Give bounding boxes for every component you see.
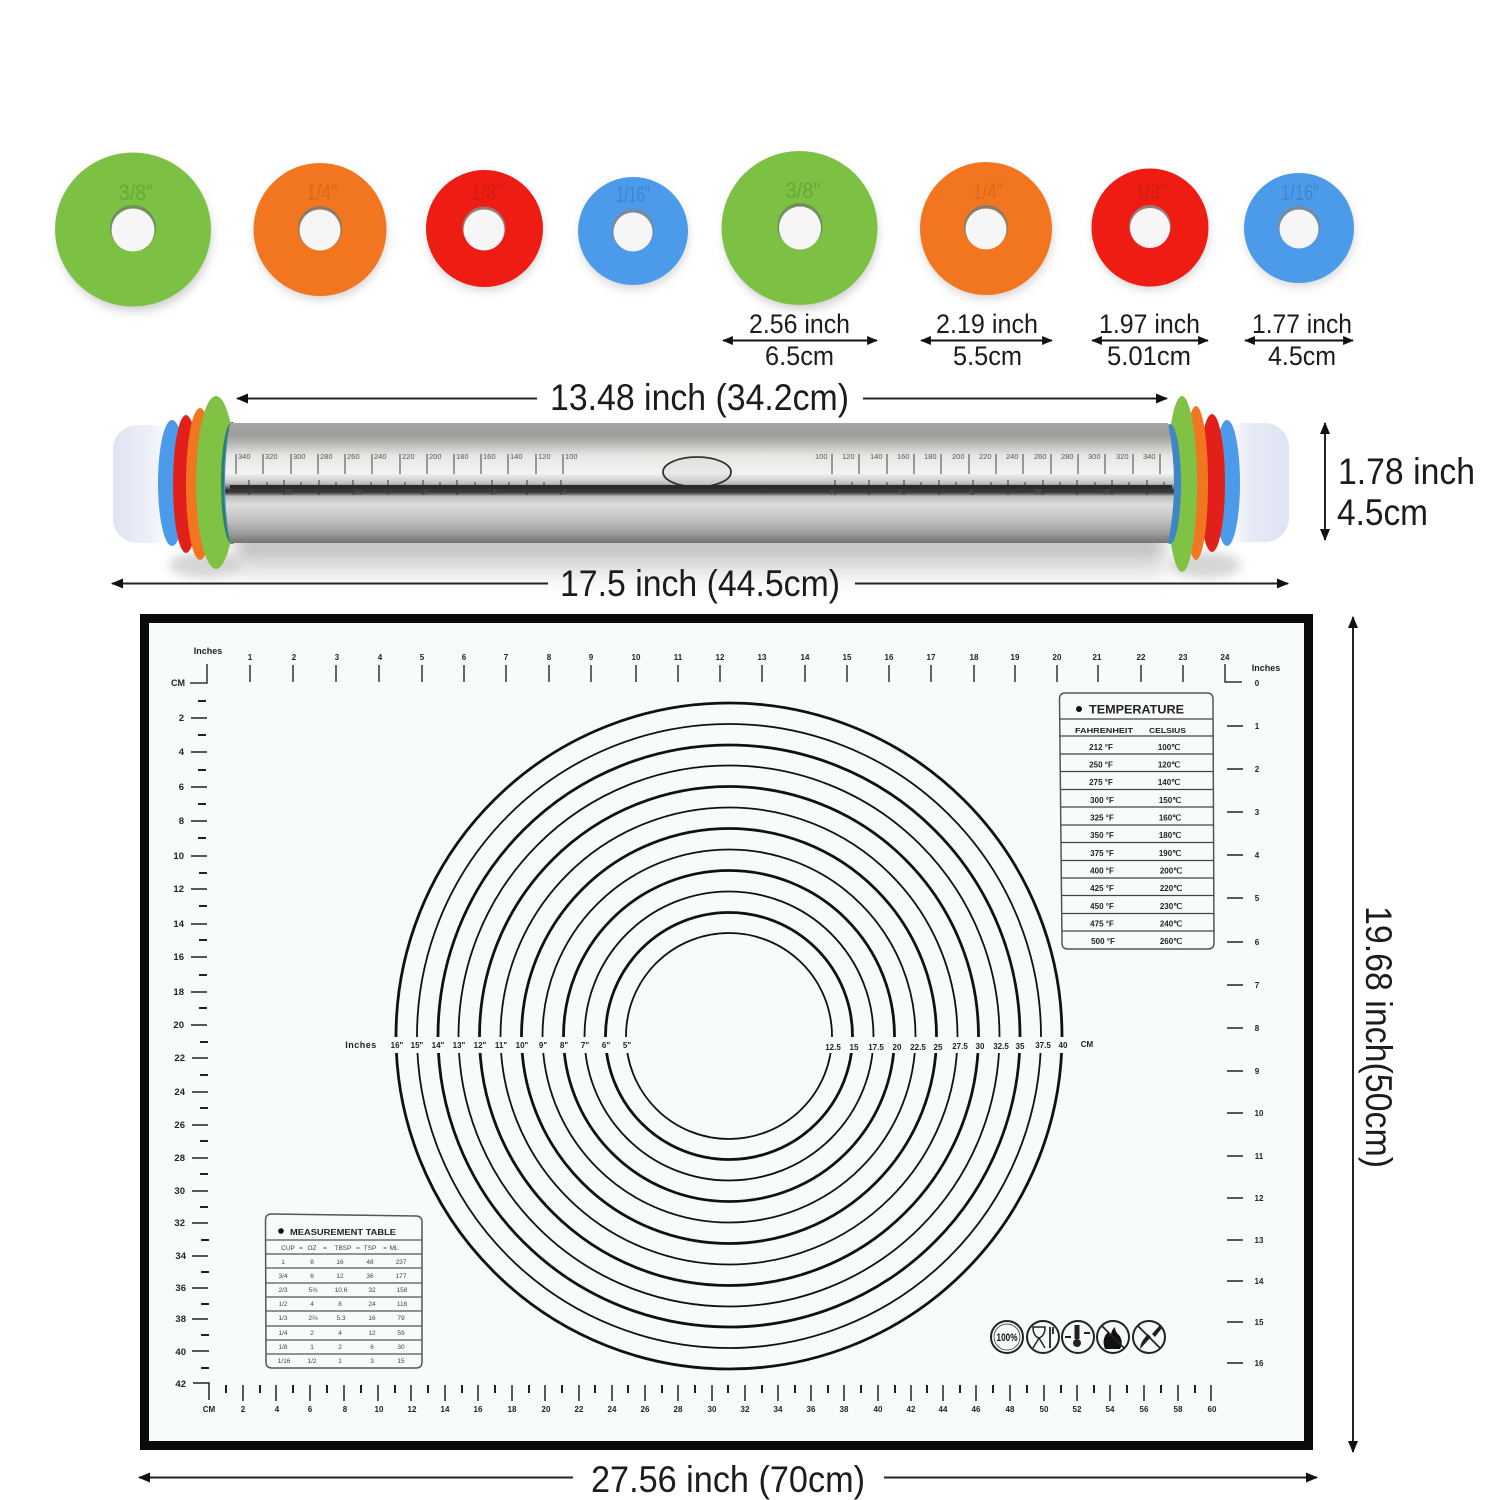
bottom centimetre ruler: 24: [608, 1405, 617, 1414]
circle inch labels: 8": [560, 1041, 568, 1050]
left centimetre ruler: 14: [173, 919, 185, 930]
disc: blue 1/16: [578, 177, 688, 289]
left ruler markings: 300: [293, 452, 306, 461]
temperature table: [1060, 693, 1214, 949]
bottom centimetre ruler: 52: [1073, 1405, 1082, 1414]
measurement table: CUP: [281, 1245, 295, 1252]
left spacer stack: [158, 396, 243, 569]
measurement table: OZ: [307, 1245, 317, 1252]
measurement table: 8: [310, 1259, 314, 1266]
left ruler markings: 4: [562, 488, 566, 497]
disc: blue 1.77 inch: 1/16": [1281, 180, 1319, 205]
right inch ruler: 12: [1255, 1194, 1264, 1203]
circle inch labels: 13": [453, 1041, 466, 1050]
right ruler markings: 300: [1088, 452, 1101, 461]
measurement table: 2: [338, 1344, 342, 1351]
measurement table: 59: [397, 1330, 405, 1337]
left centimetre ruler: 10: [173, 851, 184, 862]
temperature table: 212 °F: [1089, 743, 1113, 752]
bottom centimetre ruler: 36: [807, 1405, 816, 1414]
measurement table: 4: [310, 1301, 314, 1308]
bottom centimetre ruler: 48: [1006, 1405, 1015, 1414]
disc: orange 2.19 inch: 1/4": [973, 179, 1003, 204]
bottom centimetre ruler: 40: [874, 1405, 883, 1414]
measurement table: 1: [338, 1358, 342, 1365]
temperature table: TEMPERATURE: [1089, 704, 1184, 716]
left ruler markings: 10: [354, 488, 362, 497]
icon: no knife: [1133, 1321, 1165, 1353]
temperature table: 300 °F: [1090, 796, 1114, 805]
measurement table: 1/2: [278, 1301, 288, 1308]
disc: red 1.97 inch: 1.97 inch: [1099, 309, 1200, 339]
right inch ruler: 5: [1255, 894, 1260, 903]
temperature table: 350 °F: [1090, 831, 1114, 840]
right ruler markings: 6: [899, 488, 903, 497]
measurement table: =: [356, 1245, 360, 1252]
bottom centimetre ruler: 28: [674, 1405, 683, 1414]
pastry mat: [144, 618, 1308, 1446]
top inch ruler: 20: [1053, 653, 1062, 662]
circle inch labels: 9": [539, 1041, 547, 1050]
right ruler markings: 200: [952, 452, 965, 461]
left ruler markings: 180: [456, 452, 469, 461]
measurement table: 16: [336, 1259, 344, 1266]
temperature table: 240℃: [1160, 920, 1182, 928]
right inch ruler: 16: [1255, 1359, 1264, 1368]
bottom centimetre ruler: 2: [241, 1405, 246, 1414]
temperature table: 150℃: [1159, 796, 1181, 805]
bottom centimetre ruler: 4: [275, 1405, 280, 1414]
left ruler markings: 120: [538, 452, 551, 461]
left centimetre ruler: 28: [174, 1153, 185, 1164]
top inch ruler: 6: [462, 653, 467, 662]
right inch ruler: 9: [1255, 1067, 1260, 1076]
temperature table: 325 °F: [1090, 814, 1114, 822]
icon: food safe: [1027, 1321, 1059, 1353]
measurement table: 118: [397, 1301, 408, 1308]
temperature table: 260℃: [1160, 937, 1182, 946]
left ruler markings: 160: [483, 452, 496, 461]
disc: blue 1.77 inch: 1.77 inch: [1252, 309, 1352, 339]
measurement table: 79: [397, 1315, 405, 1322]
disc: blue 1.77 inch: [1244, 173, 1354, 371]
measurement table: 36: [366, 1273, 374, 1280]
temperature table: 400 °F: [1090, 866, 1114, 876]
left centimetre ruler: 38: [175, 1314, 186, 1325]
measurement table: 1/8: [278, 1344, 288, 1351]
right ruler markings: 8: [969, 488, 973, 497]
right inch ruler: 15: [1255, 1318, 1264, 1327]
measurement table: 2: [310, 1330, 314, 1337]
circle centimetre labels: 32.5: [993, 1042, 1009, 1051]
top inch ruler: 17: [927, 653, 936, 662]
top inch ruler: 2: [292, 653, 297, 662]
measurement table: 1/2: [307, 1358, 317, 1365]
bottom centimetre ruler: 50: [1040, 1405, 1049, 1414]
left ruler markings: 280: [320, 452, 333, 461]
left centimetre ruler: 12: [173, 884, 184, 895]
temperature table: 250 °F: [1089, 760, 1113, 770]
measurement table: 1/16: [278, 1358, 291, 1365]
right ruler markings: 260: [1034, 452, 1047, 461]
mat border: [144, 618, 1308, 1446]
measurement table: 1/4: [278, 1330, 288, 1337]
icon: temperature range: [1062, 1321, 1094, 1353]
left ruler markings: 140: [510, 452, 523, 461]
bottom centimetre ruler: 10: [375, 1405, 384, 1414]
right ruler markings: 4: [830, 488, 834, 497]
right inch ruler: Inches: [1252, 663, 1280, 673]
bottom centimetre ruler: 16: [474, 1405, 483, 1414]
measurement table: =: [383, 1245, 387, 1252]
circle inch labels: [345, 1040, 631, 1050]
measurement table: 12: [336, 1273, 344, 1280]
top inch ruler: 18: [970, 653, 979, 662]
dimension: pin total length: 17.5 inch (44.5cm): [560, 563, 840, 604]
circle centimetre labels: 12.5: [825, 1043, 841, 1052]
right ruler markings: 340: [1143, 452, 1156, 461]
right ruler markings: 180: [924, 452, 937, 461]
disc: orange 1/4: 1/4": [306, 180, 338, 205]
top inch ruler: 19: [1011, 653, 1020, 662]
right inch ruler: 10: [1255, 1109, 1264, 1118]
left ruler markings: 260: [347, 452, 360, 461]
circle inch labels: 6": [602, 1041, 610, 1050]
top inch ruler: 23: [1179, 653, 1188, 662]
left ruler markings: 200: [429, 452, 442, 461]
left centimetre ruler: 32: [174, 1218, 185, 1229]
measurement table: 1: [281, 1259, 285, 1266]
right ruler markings: 100: [815, 452, 828, 461]
top inch ruler: 13: [758, 653, 767, 662]
bottom centimetre ruler: 44: [939, 1405, 948, 1414]
right inch ruler: 14: [1255, 1277, 1264, 1286]
right ruler markings: 12: [1103, 488, 1111, 497]
top inch ruler: Inches: [194, 646, 222, 656]
measurement table: 10.6: [335, 1287, 348, 1294]
temperature table: 500 °F: [1091, 937, 1115, 946]
bottom centimetre ruler: 32: [741, 1405, 750, 1414]
top inch ruler: [171, 646, 1242, 688]
bottom centimetre ruler: 54: [1106, 1405, 1115, 1414]
icon: 100 percent: [991, 1321, 1023, 1353]
measurement table: 2⅔: [308, 1315, 318, 1322]
measurement table: 32: [368, 1287, 376, 1294]
right inch ruler: 4: [1255, 851, 1260, 860]
left ruler markings: 320: [265, 452, 278, 461]
measurement table: ML: [389, 1245, 399, 1252]
temperature table: FAHRENHEIT: [1075, 726, 1134, 735]
bottom centimetre ruler: 34: [774, 1405, 783, 1414]
disc: orange 1/4: [254, 163, 386, 299]
left centimetre ruler: 42: [175, 1379, 186, 1390]
top inch ruler: 4: [378, 653, 383, 662]
disc: red 1.97 inch: 5.01cm: [1107, 341, 1191, 371]
left ruler markings: 6: [493, 488, 497, 497]
measurement table: 15: [397, 1358, 405, 1365]
right ruler markings: 120: [842, 452, 855, 461]
icon: no flame: [1097, 1321, 1129, 1353]
disc: green 2.56 inch: 2.56 inch: [749, 309, 850, 339]
temperature table: 220℃: [1160, 884, 1182, 893]
right inch ruler: 11: [1255, 1152, 1264, 1161]
left centimetre ruler: 6: [179, 782, 184, 793]
measurement table: 6: [310, 1273, 314, 1280]
circle inch labels: 14": [432, 1041, 445, 1050]
left ruler markings: 240: [374, 452, 387, 461]
disc: green 2.56 inch: 3/8": [786, 178, 820, 203]
left centimetre ruler: 30: [174, 1186, 185, 1197]
top inch ruler: 12: [716, 653, 725, 662]
measurement table: =: [323, 1245, 327, 1252]
left centimetre ruler: 22: [174, 1053, 185, 1064]
icon row: certifications: [991, 1321, 1165, 1353]
right ruler markings: 160: [897, 452, 910, 461]
bottom centimetre ruler: 6: [308, 1405, 313, 1414]
measurement table: 1: [310, 1344, 314, 1351]
top inch ruler: 11: [674, 653, 683, 662]
measurement table: 4: [338, 1330, 342, 1337]
right inch ruler: 0: [1255, 679, 1260, 688]
disc: green 2.56 inch: 6.5cm: [765, 341, 834, 371]
left end cap: [113, 425, 178, 543]
right ruler markings: 140: [870, 452, 883, 461]
disc: orange 2.19 inch: 2.19 inch: [936, 309, 1038, 339]
circle centimetre labels: 15: [850, 1043, 859, 1052]
disc: red 1.97 inch: 1/8": [1136, 179, 1166, 204]
left ruler markings: 220: [402, 452, 415, 461]
left ruler markings: 100: [565, 452, 578, 461]
left ruler markings: [236, 452, 578, 497]
circle centimetre labels: 35: [1016, 1042, 1025, 1051]
right inch ruler: 2: [1255, 765, 1260, 774]
right ruler markings: 220: [979, 452, 992, 461]
dimension: pin diameter: 4.5cm: [1337, 492, 1428, 533]
spacer discs row with dimensions: [722, 151, 1354, 371]
measurement table: 16: [368, 1315, 376, 1322]
barrel oval logo: [663, 457, 731, 487]
concentric circles: [396, 703, 1062, 1369]
circle centimetre labels: 25: [934, 1043, 943, 1052]
circle inch labels: 12": [474, 1041, 487, 1050]
circle centimetre labels: 20: [893, 1043, 902, 1052]
left centimetre ruler: 20: [173, 1020, 184, 1031]
temperature table: 475 °F: [1090, 920, 1114, 928]
temperature table: 450 °F: [1090, 902, 1114, 911]
measurement table: 237: [396, 1259, 407, 1266]
measurement table: TBSP: [335, 1245, 351, 1252]
right ruler markings: 320: [1116, 452, 1129, 461]
top inch ruler: 10: [632, 653, 641, 662]
right inch ruler: 8: [1255, 1024, 1260, 1033]
temperature table: 275 °F: [1089, 778, 1113, 787]
measurement table: 3: [370, 1358, 374, 1365]
right inch ruler: 3: [1255, 808, 1260, 817]
top inch ruler: 14: [801, 653, 810, 662]
bottom centimetre ruler: [203, 1385, 1217, 1414]
temperature table: 190℃: [1159, 849, 1181, 858]
circle centimetre labels: 37.5: [1035, 1041, 1051, 1050]
left centimetre ruler: 2: [179, 713, 184, 724]
top inch ruler: 21: [1093, 653, 1102, 662]
top inch ruler: 9: [589, 653, 594, 662]
bottom centimetre ruler: 18: [508, 1405, 517, 1414]
disc: blue 1/16: 1/16": [616, 182, 650, 207]
temperature table: CELSIUS: [1149, 726, 1186, 735]
left centimetre ruler: 26: [174, 1120, 185, 1131]
right inch ruler: 7: [1255, 981, 1260, 990]
top inch ruler: 1: [248, 653, 253, 662]
circle inch labels: 15": [411, 1041, 424, 1050]
temperature table: 100℃: [1158, 743, 1180, 752]
measurement table: 3/4: [278, 1273, 288, 1280]
bottom centimetre ruler: 56: [1140, 1405, 1149, 1414]
right spacer stack: [1159, 396, 1240, 572]
temperature table: 230℃: [1160, 902, 1182, 911]
icon: 100 percent: 100%: [996, 1332, 1018, 1344]
measurement table: TSP: [364, 1245, 376, 1252]
bottom centimetre ruler: 26: [641, 1405, 650, 1414]
circle centimetre labels: 40: [1059, 1041, 1068, 1050]
left centimetre ruler: [173, 701, 209, 1400]
right ruler markings: [815, 452, 1164, 497]
right ruler markings: 280: [1061, 452, 1074, 461]
dimension: pin diameter: 1.78 inch: [1338, 451, 1475, 492]
right inch ruler: 6: [1255, 938, 1260, 947]
disc: green 2.56 inch: [722, 151, 878, 371]
temperature table: 120℃: [1158, 760, 1180, 770]
measurement table: [266, 1214, 422, 1368]
bottom centimetre ruler: 14: [441, 1405, 450, 1414]
temperature table: 200℃: [1160, 866, 1182, 876]
left centimetre ruler: 36: [175, 1283, 186, 1294]
circle inch labels: 10": [516, 1041, 529, 1050]
disc: red 1/8: 1/8": [472, 180, 502, 205]
top inch ruler: 5: [420, 653, 425, 662]
left centimetre ruler: 8: [179, 816, 184, 827]
dimension: pin barrel length: 13.48 inch (34.2cm): [550, 377, 849, 418]
disc: orange 2.19 inch: 5.5cm: [953, 341, 1022, 371]
bottom centimetre ruler: 42: [907, 1405, 916, 1414]
steel barrel: [225, 423, 1174, 543]
circle inch labels: 11": [495, 1041, 507, 1050]
top inch ruler: 3: [335, 653, 340, 662]
measurement table: 12: [368, 1330, 376, 1337]
top inch ruler: 7: [504, 653, 509, 662]
measurement table: 1/3: [278, 1315, 288, 1322]
left centimetre ruler: 16: [173, 952, 184, 963]
temperature table: 180℃: [1159, 831, 1181, 840]
top inch ruler: 8: [547, 653, 552, 662]
dimension: pin diameter: [1325, 423, 1475, 540]
circle centimetre labels: 17.5: [868, 1043, 884, 1052]
dimension: mat width: 27.56 inch (70cm): [591, 1459, 865, 1500]
top inch ruler: 16: [885, 653, 894, 662]
left centimetre ruler: 24: [174, 1087, 186, 1098]
temperature table: 425 °F: [1090, 884, 1114, 893]
circle centimetre labels: CM: [1081, 1040, 1094, 1049]
right inch ruler: 1: [1255, 722, 1260, 731]
measurement table: 5⅓: [308, 1287, 318, 1294]
measurement table: 24: [368, 1301, 376, 1308]
bottom centimetre ruler: 8: [343, 1405, 348, 1414]
right ruler markings: 240: [1006, 452, 1019, 461]
disc: red 1.97 inch: [1092, 168, 1208, 371]
disc: green 3/8: 3/8": [119, 180, 153, 205]
circle centimetre labels: 22.5: [910, 1043, 926, 1052]
circle inch labels: 16": [391, 1041, 404, 1050]
left ruler markings: 8: [423, 488, 427, 497]
temperature table: 160℃: [1159, 814, 1181, 822]
temperature table: 140℃: [1158, 778, 1180, 787]
left centimetre ruler: 18: [173, 987, 184, 998]
top inch ruler: 22: [1137, 653, 1146, 662]
measurement table: 8: [338, 1301, 342, 1308]
dimension: mat height: 19.68 inch(50cm): [1358, 906, 1399, 1168]
bottom centimetre ruler: 12: [408, 1405, 417, 1414]
rolling pin: [113, 396, 1289, 582]
right inch ruler: 13: [1255, 1236, 1264, 1245]
left ruler markings: 340: [238, 452, 251, 461]
circle centimetre labels: 30: [976, 1042, 985, 1051]
measurement table: 5.3: [336, 1315, 346, 1322]
top inch ruler: CM: [171, 678, 185, 688]
bottom centimetre ruler: 30: [708, 1405, 717, 1414]
circle inch labels: Inches: [345, 1040, 377, 1050]
right inch ruler: [1227, 663, 1280, 1368]
measurement table: 6: [370, 1344, 374, 1351]
bottom centimetre ruler: 22: [575, 1405, 584, 1414]
top inch ruler: 24: [1221, 653, 1230, 662]
bottom centimetre ruler: 58: [1174, 1405, 1183, 1414]
measurement table: 30: [397, 1344, 405, 1351]
bottom centimetre ruler: 20: [542, 1405, 551, 1414]
disc: blue 1.77 inch: 4.5cm: [1268, 341, 1336, 371]
measurement table: 158: [397, 1287, 408, 1294]
measurement table: 2/3: [278, 1287, 288, 1294]
circle inch labels: 5": [623, 1041, 631, 1050]
spacer discs row, unlabelled: [55, 152, 688, 311]
circle inch labels: 7": [581, 1041, 589, 1050]
bottom centimetre ruler: 60: [1208, 1405, 1217, 1414]
left ruler markings: 12: [284, 488, 292, 497]
measurement table: MEASUREMENT TABLE: [290, 1228, 397, 1237]
circle centimetre labels: 27.5: [952, 1042, 968, 1051]
left centimetre ruler: 34: [175, 1251, 187, 1262]
temperature table: 375 °F: [1090, 849, 1114, 858]
measurement table: =: [299, 1245, 303, 1252]
top inch ruler: 15: [843, 653, 852, 662]
left centimetre ruler: 40: [175, 1347, 186, 1358]
bottom centimetre ruler: 38: [840, 1405, 849, 1414]
disc: green 3/8: [55, 152, 211, 311]
right end cap: [1220, 423, 1289, 542]
left centimetre ruler: 4: [179, 747, 185, 758]
measurement table: 177: [396, 1273, 407, 1280]
right ruler markings: 10: [1034, 488, 1042, 497]
bottom centimetre ruler: 46: [972, 1405, 981, 1414]
measurement table: 48: [366, 1259, 374, 1266]
bottom centimetre ruler: CM: [203, 1405, 216, 1414]
disc: orange 2.19 inch: [920, 162, 1052, 371]
disc: red 1/8: [426, 170, 543, 290]
circle centimetre labels: [825, 1040, 1094, 1052]
